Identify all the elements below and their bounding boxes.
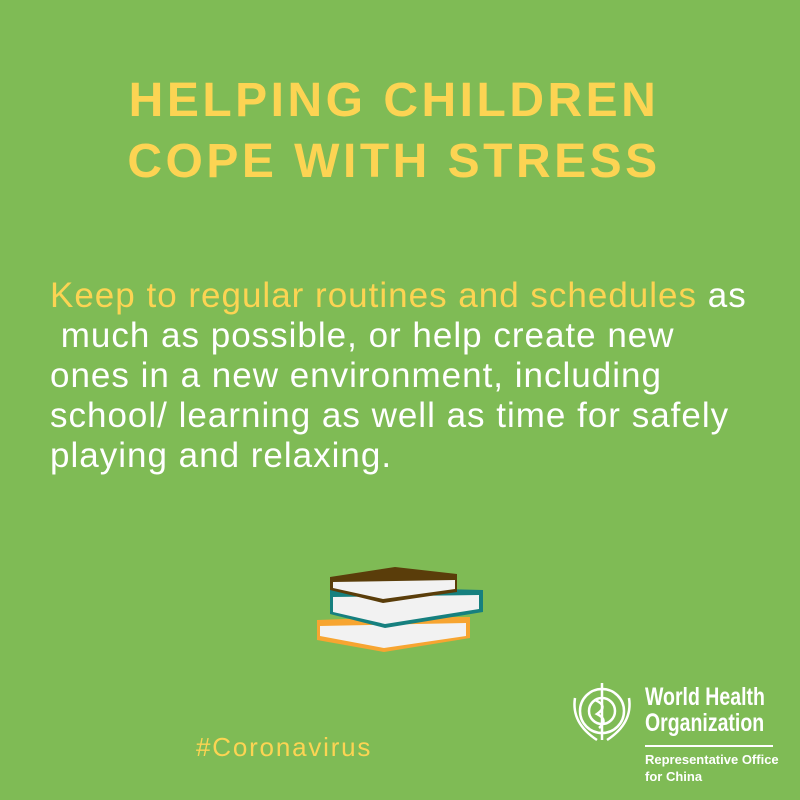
title: COPE WITH STRESS <box>127 135 661 188</box>
logo: WHO: Representative Office <box>645 752 779 767</box>
text: org name <box>645 683 765 737</box>
text: org name: Organization <box>645 709 764 737</box>
body text: playing and relaxing. <box>50 436 392 475</box>
title: HELPING CHILDREN <box>129 74 659 127</box>
body text: much as possible, or help create new <box>61 316 675 355</box>
title <box>127 74 661 188</box>
hashtag: #Coronavirus <box>196 732 372 762</box>
logo: WHO <box>573 683 779 784</box>
logo: WHO: for China <box>645 769 702 784</box>
body text: ones in a new environment, including <box>50 356 662 395</box>
text: org name: World Health <box>645 683 765 711</box>
body text <box>50 276 747 475</box>
body text: Keep to regular routines and schedules as <box>50 276 747 315</box>
icon: emblem <box>573 683 631 741</box>
body text: school/ learning as well as time for safely <box>50 396 729 435</box>
